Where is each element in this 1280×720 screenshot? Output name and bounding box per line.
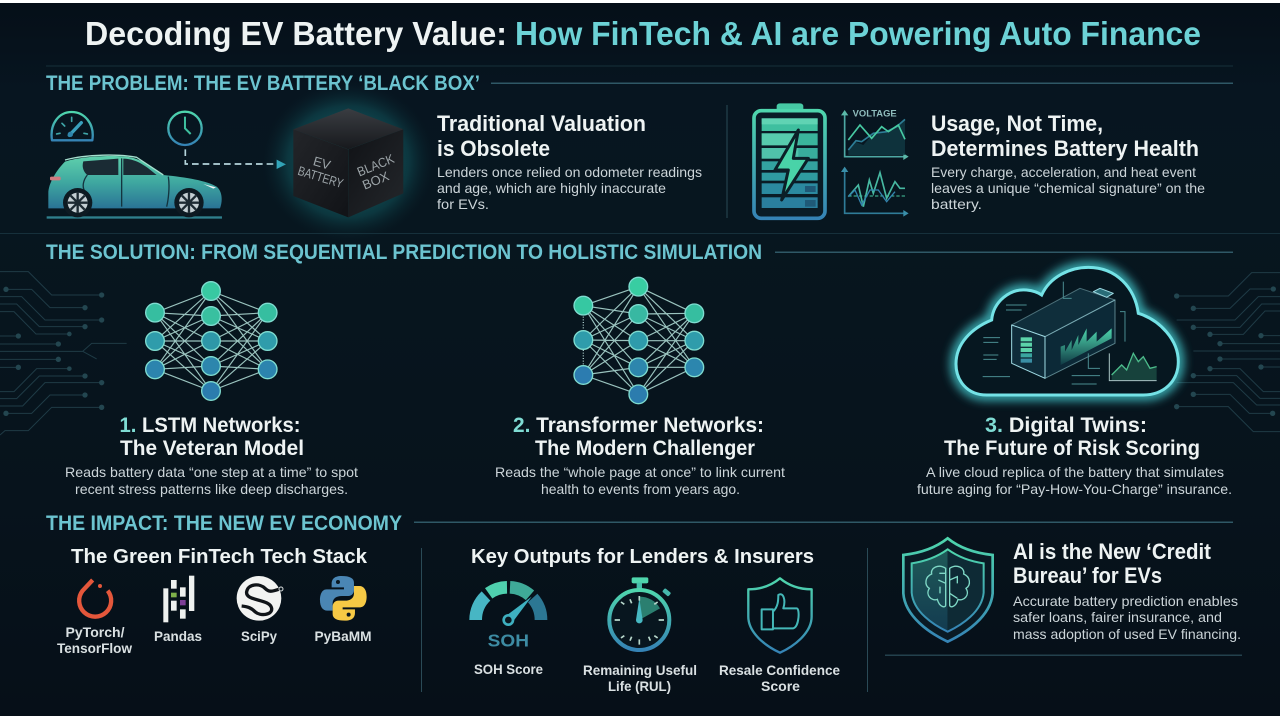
text block: AI credit bureau: AI is the New ‘Credit — [1013, 539, 1212, 564]
text block: traditional valuation: Lenders once relied on odometer readings — [437, 164, 702, 180]
heading: key outputs: Key Outputs for Lenders & Insurers — [471, 546, 814, 568]
icon: shield with thumb up — [748, 578, 812, 653]
icon: battery — [754, 103, 825, 218]
text block: transformer networks: 2. Transformer Networks: — [513, 414, 764, 437]
icon: black box: EV — [311, 153, 333, 173]
label: resale confidence score: Resale Confidence — [719, 662, 840, 678]
icon: transformer neural network — [574, 277, 704, 404]
icon: clock — [168, 112, 202, 145]
label: SOH score: SOH Score — [474, 661, 543, 677]
text block: LSTM networks: 1. LSTM Networks: — [120, 414, 300, 437]
text block: transformer networks: Reads the “whole page at once” to link current — [495, 464, 785, 480]
text block: traditional valuation — [437, 111, 702, 212]
icon: shield with AI brain — [903, 538, 993, 642]
battery cell model — [1012, 288, 1115, 378]
text block: LSTM networks — [65, 414, 358, 497]
text block: traditional valuation: and age, which are highly inaccurate — [437, 180, 666, 196]
text block: usage not time: battery. — [931, 196, 982, 212]
label: remaining useful life: Life (RUL) — [608, 678, 671, 694]
icon: digital twin cloud — [956, 267, 1178, 395]
label: resale confidence score: Score — [761, 678, 800, 694]
label: pytorch tensorflow: PyTorch/ — [66, 624, 125, 640]
icon: black box: BATTERY — [296, 163, 345, 191]
text block: AI credit bureau: Bureau’ for EVs — [1013, 563, 1162, 588]
chart: voltage line chart: VOLTAGE — [853, 109, 897, 119]
title: Decoding EV Battery Value: — [85, 15, 507, 52]
text block: transformer networks: health to events from years ago. — [541, 481, 740, 497]
icon: stopwatch — [609, 577, 671, 650]
icon: pandas — [163, 576, 194, 622]
text block: AI credit bureau — [1013, 539, 1241, 642]
text block: digital twins: 3. Digital Twins: — [985, 414, 1147, 437]
arrow: dashed connector — [185, 149, 286, 169]
icon: black box: BLACK — [355, 151, 397, 179]
label: pytorch tensorflow: TensorFlow — [57, 640, 132, 656]
text block: digital twins — [917, 414, 1232, 497]
text block: usage not time: leaves a unique “chemical signature” on the — [931, 180, 1205, 196]
label: remaining useful life — [583, 662, 697, 694]
text block: AI credit bureau: Accurate battery prediction enables — [1013, 593, 1238, 609]
text block: LSTM networks: Reads battery data “one step at a time” to spot — [65, 464, 358, 480]
icon: car with odometer and clock feeding black box — [47, 82, 435, 242]
panel: key output icons — [476, 577, 812, 653]
section heading: the impact: THE IMPACT: THE NEW EV ECONOMY — [46, 511, 402, 535]
text block: LSTM networks: The Veteran Model — [120, 437, 304, 460]
text block: usage not time: Usage, Not Time, — [931, 111, 1103, 136]
icon: odometer gauge — [52, 112, 93, 140]
label: pybamm: PyBaMM — [314, 628, 372, 644]
circuit pattern right — [1174, 273, 1280, 432]
heading: tech stack: The Green FinTech Tech Stack — [71, 546, 368, 568]
label: scipy: SciPy — [241, 628, 277, 644]
text block: digital twins: The Future of Risk Scoring — [944, 437, 1200, 460]
text block: traditional valuation: for EVs. — [437, 196, 489, 212]
label: remaining useful life: Remaining Useful — [583, 662, 697, 678]
icon: pytorch — [79, 580, 111, 617]
icon: black box — [262, 82, 435, 242]
icon: battery and voltage charts — [754, 103, 909, 218]
mini charts and data labels — [983, 282, 1157, 384]
circuit pattern left — [0, 272, 127, 435]
text block: traditional valuation: is Obsolete — [437, 136, 550, 161]
text block: AI credit bureau: mass adoption of used EV financing. — [1013, 626, 1241, 642]
icon: scipy — [237, 576, 283, 621]
icon: SOH gauge: SOH — [488, 631, 529, 651]
text block: transformer networks — [495, 414, 785, 497]
icon: SOH gauge — [476, 587, 541, 651]
label: pandas: Pandas — [154, 628, 202, 644]
label: resale confidence score — [719, 662, 840, 694]
icon: LSTM neural network — [146, 282, 277, 400]
chart: voltage line chart — [841, 109, 909, 160]
text block: usage not time — [931, 111, 1205, 212]
text block: usage not time: Every charge, acceleration, and heat event — [931, 164, 1196, 180]
icon: black box: BOX — [360, 168, 391, 193]
section heading: the solution: THE SOLUTION: FROM SEQUENTIAL PREDICTION TO HOLISTIC SIMULATION — [46, 240, 762, 264]
icon: pybamm python — [320, 576, 367, 621]
text block: digital twins: A live cloud replica of the battery that simulates — [926, 464, 1224, 480]
panel: tech stack logos — [79, 576, 367, 622]
section heading: the problem: THE PROBLEM: THE EV BATTERY ‘BLACK BOX’ — [46, 71, 480, 95]
text block: AI credit bureau: safer loans, fairer insurance, and — [1013, 609, 1222, 625]
label: pytorch tensorflow — [57, 624, 132, 656]
text block: LSTM networks: recent stress patterns like deep discharges. — [75, 481, 348, 497]
text block: traditional valuation: Traditional Valuation — [437, 111, 646, 136]
text block: transformer networks: The Modern Challenger — [535, 437, 755, 460]
text block: digital twins: future aging for “Pay-How-You-Charge” insurance. — [917, 481, 1232, 497]
title — [85, 15, 1201, 52]
title: How FinTech & AI are Powering Auto Finance — [515, 15, 1201, 52]
icon: car — [47, 155, 222, 219]
text block: usage not time: Determines Battery Health — [931, 136, 1199, 161]
chart: stress line chart — [841, 167, 909, 217]
